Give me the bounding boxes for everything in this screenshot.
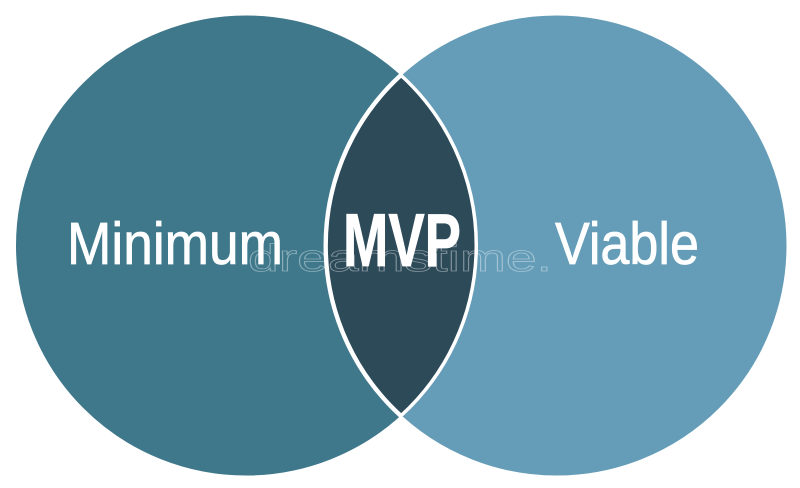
intersection: MVP lens <box>326 76 476 416</box>
circle: viable <box>325 14 788 477</box>
label: Viable: Viable <box>555 211 699 277</box>
label: Minimum: Minimum <box>67 211 283 277</box>
watermark: dreamstime. <box>248 238 552 280</box>
label: MVP: MVP <box>343 198 461 282</box>
circle: minimum <box>14 14 478 477</box>
